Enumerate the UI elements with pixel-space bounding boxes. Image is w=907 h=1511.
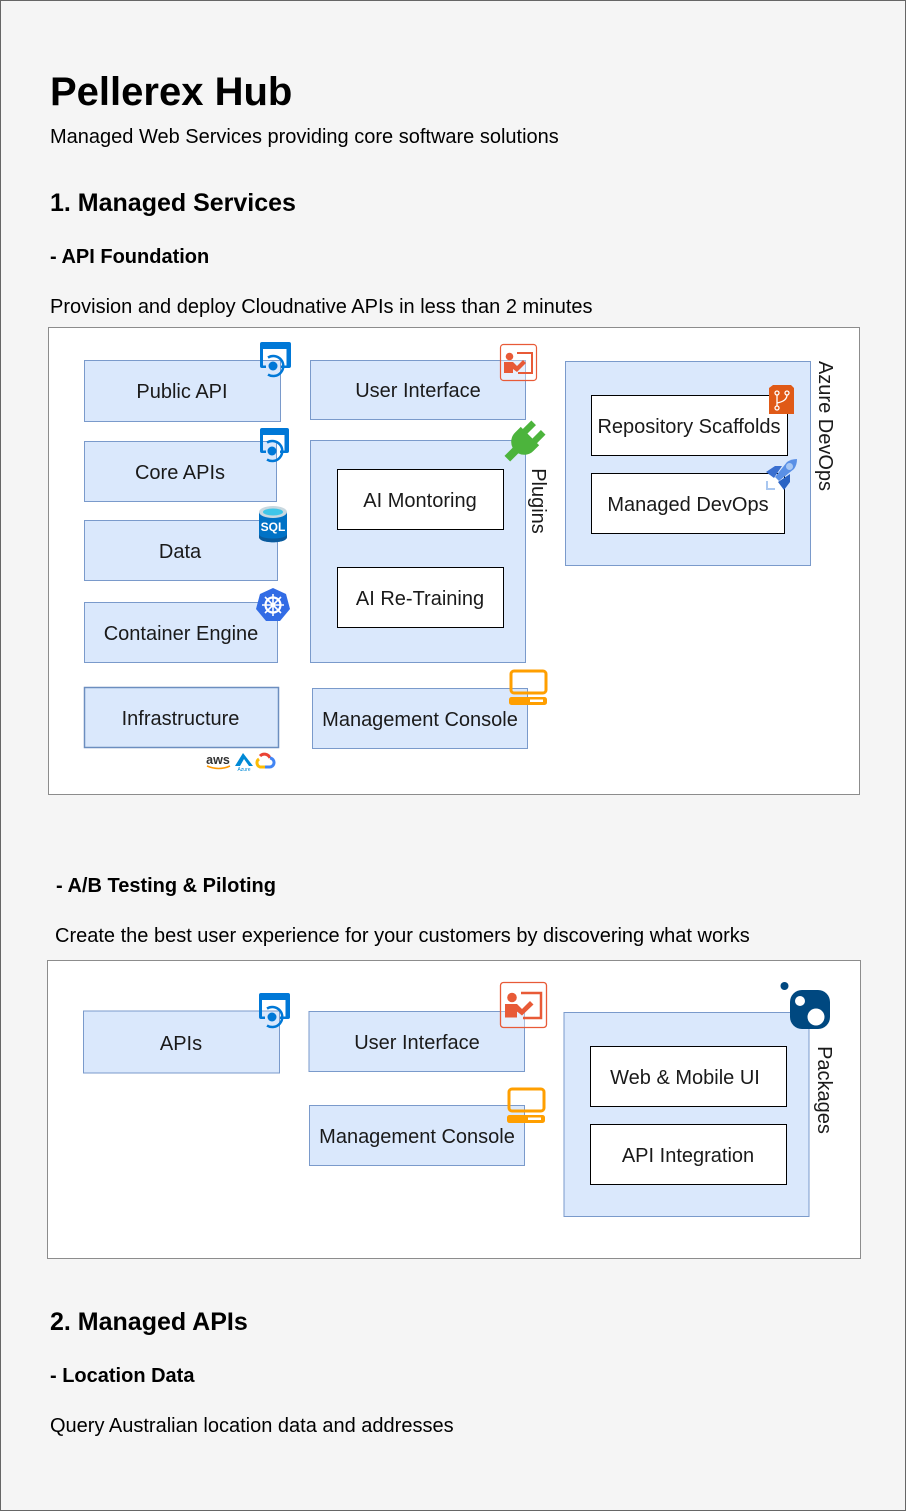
box: public API [84, 360, 280, 422]
box: infrastructure [84, 688, 278, 748]
box: AI monitoring [338, 470, 504, 530]
icon: azure repos [769, 385, 794, 414]
heading: managed APIs: 2. Managed APIs [50, 1308, 248, 1336]
box: repository scaffolds [592, 396, 788, 456]
group: azure devops [566, 362, 810, 566]
icon: azure pipelines [766, 459, 797, 490]
icon: monitor 1 [509, 671, 547, 705]
box: web and mobile UI: Web & Mobile UI [610, 1067, 760, 1089]
panel: API foundation [48, 328, 860, 794]
box: AI re-training [338, 568, 504, 628]
group: plugins [310, 440, 526, 662]
box: management console: Management Console [322, 709, 518, 731]
box: AI re-training: AI Re-Training [356, 588, 484, 610]
icon: SQL database [259, 506, 287, 542]
box: web and mobile UI [590, 1046, 786, 1106]
group: packages [564, 1012, 809, 1216]
box: user interface 2: User Interface [354, 1032, 480, 1054]
box: management console 2: Management Console [319, 1126, 515, 1148]
subtitle: Managed Web Services providing core software solutions [50, 126, 559, 148]
box: management console [312, 688, 528, 748]
icon: plug [498, 418, 548, 468]
box: container engine [84, 602, 278, 662]
box: management console 2 [310, 1106, 524, 1166]
heading: managed services: 1. Managed Services [50, 189, 296, 217]
description: A/B testing: Create the best user experience for your customers by discovering what works [55, 925, 750, 947]
icon: monitor 2 [507, 1089, 545, 1123]
description: API foundation: Provision and deploy Cloudnative APIs in less than 2 minutes [50, 296, 593, 318]
box: user interface [310, 360, 526, 420]
icon: nuget [780, 982, 830, 1029]
box: data [84, 520, 278, 580]
panel: A/B testing [48, 960, 860, 1258]
box: API integration [590, 1124, 786, 1184]
subheading: location data: - Location Data [50, 1365, 195, 1387]
description: location data: Query Australian location data and addresses [50, 1415, 454, 1437]
icon: presenter 2 [500, 982, 546, 1028]
label: azure devops: Azure DevOps [814, 361, 836, 491]
icon: API app 3 [259, 993, 290, 1027]
subheading: API foundation: - API Foundation [50, 246, 209, 268]
box: container engine: Container Engine [104, 623, 258, 645]
icons: cloud providers: Azure [237, 767, 251, 773]
box: user interface: User Interface [355, 380, 481, 402]
box: APIs [84, 1011, 280, 1073]
box: repository scaffolds: Repository Scaffolds [597, 416, 781, 438]
icon: SQL database: SQL [261, 520, 285, 534]
box: managed devops: Managed DevOps [607, 494, 769, 516]
box: infrastructure: Infrastructure [122, 708, 239, 730]
box: public API: Public API [136, 381, 228, 403]
box: core APIs [84, 442, 276, 502]
subheading: A/B testing: - A/B Testing & Piloting [56, 875, 276, 897]
box: user interface 2 [309, 1012, 524, 1072]
box: API integration: API Integration [622, 1145, 754, 1167]
box: data: Data [159, 541, 202, 563]
icons: cloud providers: aws [206, 753, 230, 767]
box: managed devops [592, 474, 784, 534]
box: APIs: APIs [160, 1033, 202, 1055]
icon: API app 1 [260, 342, 291, 376]
box: AI monitoring: AI Montoring [363, 490, 477, 512]
label: packages: Packages [813, 1046, 835, 1134]
box: core APIs: Core APIs [135, 462, 225, 484]
label: plugins: Plugins [527, 468, 549, 534]
icon: API app 2 [260, 428, 289, 461]
icons: cloud providers [206, 753, 274, 773]
title: Pellerex Hub [50, 70, 292, 114]
icon: presenter 1 [500, 344, 536, 380]
icon: kubernetes [256, 588, 290, 621]
